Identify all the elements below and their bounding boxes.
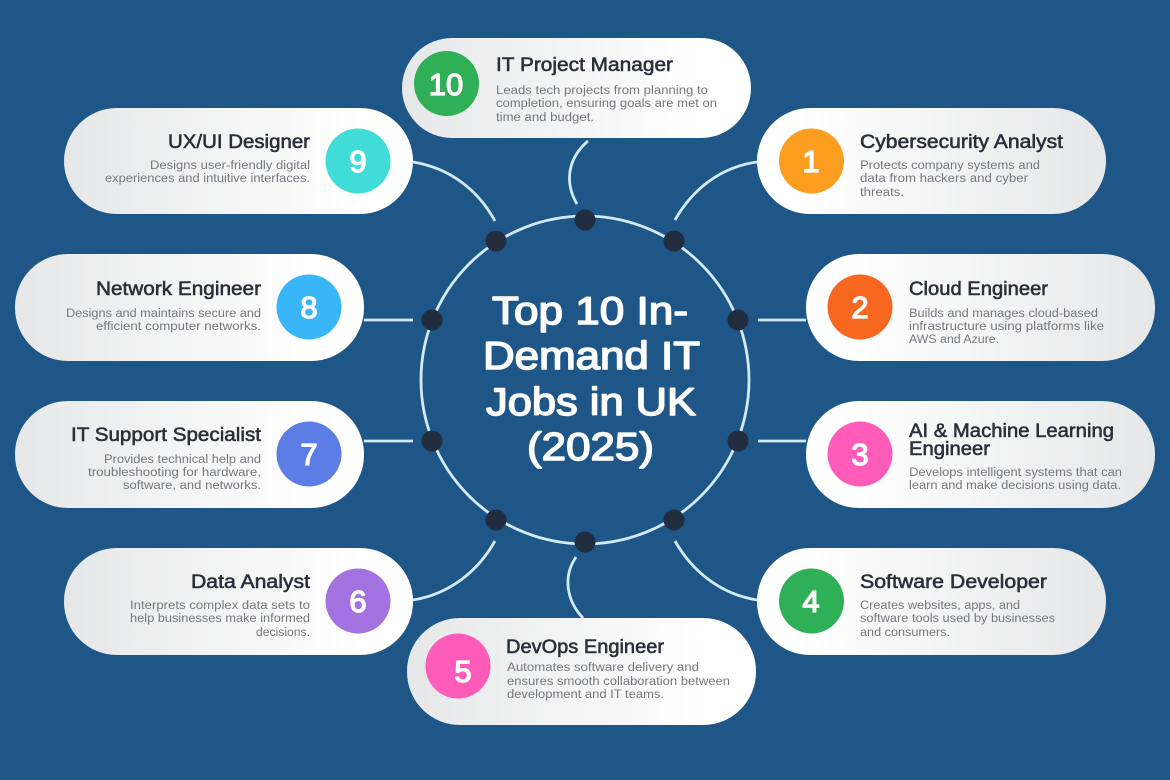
card 1: Cybersecurity Analyst: data from hackers and cyber	[860, 173, 1028, 185]
card 4: Software Developer: 4	[802, 584, 820, 619]
card 9: UX/UI Designer: experiences and intuitive interfaces.	[105, 173, 310, 185]
card 4: Software Developer	[757, 548, 1106, 655]
card 4: Software Developer: and consumers.	[860, 627, 950, 639]
card 7: IT Support Specialist: 7	[300, 437, 318, 472]
central title: Demand IT	[483, 335, 700, 378]
card 6: Data Analyst	[64, 548, 413, 655]
card 4: Software Developer: software tools used by businesses	[860, 613, 1055, 625]
card 1: Cybersecurity Analyst	[757, 108, 1106, 214]
card 2: Cloud Engineer: Builds and manages cloud-based	[909, 308, 1098, 320]
card 3: AI & Machine Learning Engineer: learn and make decisions using data.	[909, 480, 1121, 492]
card 4: Software Developer: Creates websites, apps, and	[860, 600, 1020, 612]
card 10: IT Project Manager: Leads tech projects from planning to	[496, 85, 708, 97]
ring node dots	[422, 210, 748, 552]
card 7: IT Support Specialist	[15, 401, 364, 508]
card 6: Data Analyst: decisions.	[256, 627, 310, 639]
card 4: Software Developer: Software Developer	[860, 572, 1048, 593]
card 8: Network Engineer: Network Engineer	[96, 279, 262, 300]
card 6: Data Analyst: help businesses make informed	[130, 613, 310, 625]
card 8: Network Engineer: efficient computer networks.	[96, 321, 261, 333]
central title: (2025)	[527, 426, 654, 469]
central title: Top 10 In-	[492, 290, 688, 333]
card 6: Data Analyst: Data Analyst	[191, 572, 311, 593]
central ring	[421, 216, 749, 544]
card 5: DevOps Engineer: 5	[454, 654, 472, 689]
card 5: DevOps Engineer: DevOps Engineer	[506, 637, 665, 658]
card 6: Data Analyst: Interprets complex data sets to	[130, 600, 310, 612]
card 5: DevOps Engineer: development and IT teams.	[507, 689, 664, 701]
card 8: Network Engineer: 8	[300, 290, 318, 325]
card 3: AI & Machine Learning Engineer: AI & Machine Learning	[909, 421, 1114, 442]
card 6: Data Analyst: 6	[349, 584, 367, 619]
card 3: AI & Machine Learning Engineer	[806, 401, 1155, 508]
card 2: Cloud Engineer: 2	[851, 290, 869, 325]
card 5: DevOps Engineer	[407, 618, 756, 725]
central title	[483, 290, 700, 469]
card 7: IT Support Specialist: troubleshooting for hardware,	[88, 467, 261, 479]
card 9: UX/UI Designer: UX/UI Designer	[168, 132, 311, 153]
card 10: IT Project Manager: completion, ensuring goals are met on	[496, 98, 717, 110]
card 9: UX/UI Designer	[64, 108, 413, 214]
central title: Jobs in UK	[486, 381, 696, 424]
card 9: UX/UI Designer: Designs user-friendly digital	[150, 160, 310, 172]
connector lines	[364, 141, 806, 618]
card 7: IT Support Specialist: software, and networks.	[123, 480, 261, 492]
card 7: IT Support Specialist: Provides technical help and	[104, 454, 261, 466]
card 2: Cloud Engineer: infrastructure using platforms like	[909, 321, 1104, 333]
card 2: Cloud Engineer	[806, 254, 1155, 361]
card 2: Cloud Engineer: AWS and Azure.	[909, 334, 999, 346]
card 9: UX/UI Designer: 9	[349, 144, 367, 179]
card 8: Network Engineer	[15, 254, 364, 361]
card 3: AI & Machine Learning Engineer: Engineer	[909, 439, 991, 460]
card 1: Cybersecurity Analyst: Protects company systems and	[860, 160, 1040, 172]
card 1: Cybersecurity Analyst: 1	[802, 144, 820, 179]
card 8: Network Engineer: Designs and maintains secure and	[66, 308, 261, 320]
card 5: DevOps Engineer: Automates software delivery and	[507, 662, 699, 674]
card 3: AI & Machine Learning Engineer: Develops intelligent systems that can	[909, 467, 1122, 479]
card 2: Cloud Engineer: Cloud Engineer	[909, 279, 1049, 300]
card 1: Cybersecurity Analyst: Cybersecurity Analyst	[860, 132, 1064, 153]
card 10: IT Project Manager	[402, 38, 751, 138]
card 10: IT Project Manager: time and budget.	[496, 112, 594, 124]
card 7: IT Support Specialist: IT Support Specialist	[71, 425, 262, 446]
card 10: IT Project Manager: IT Project Manager	[496, 55, 674, 76]
card 3: AI & Machine Learning Engineer: 3	[851, 437, 869, 472]
card 5: DevOps Engineer: ensures smooth collaboration between	[507, 676, 730, 688]
card 1: Cybersecurity Analyst: threats.	[860, 187, 904, 199]
card 10: IT Project Manager: 10	[429, 67, 463, 102]
